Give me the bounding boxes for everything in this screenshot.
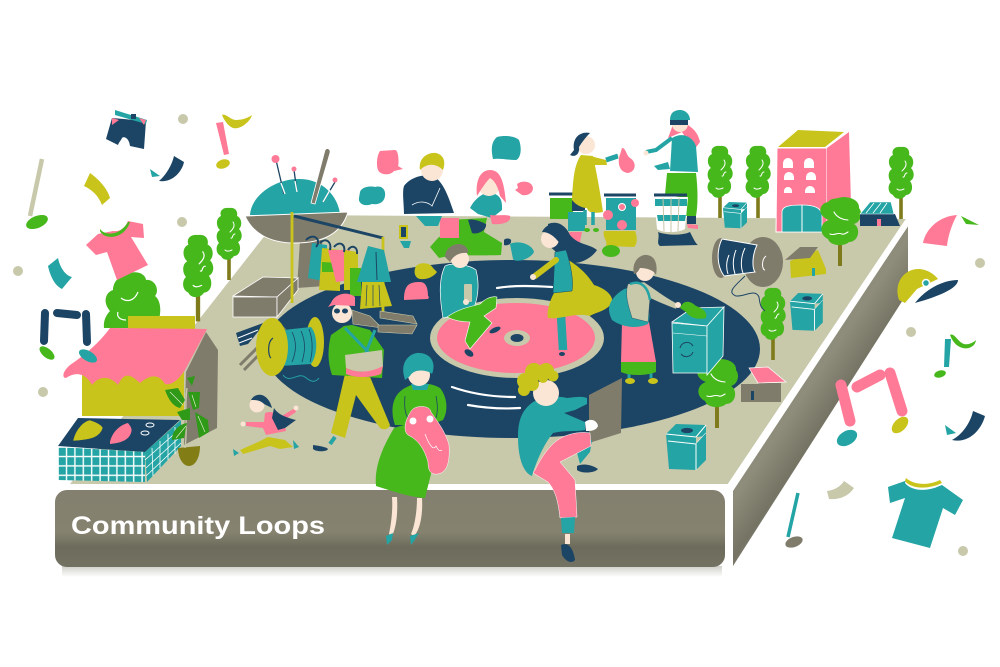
tree bbox=[761, 288, 786, 360]
head bbox=[451, 250, 469, 268]
back flange bbox=[743, 237, 783, 287]
cap bbox=[897, 269, 958, 303]
pink blob bbox=[569, 232, 582, 244]
scraps and cup bbox=[504, 238, 511, 245]
tree bbox=[697, 359, 738, 428]
cardboard boxes and rails bbox=[233, 277, 298, 370]
hands bbox=[410, 418, 416, 424]
teal rug bbox=[416, 216, 442, 226]
navy bag bbox=[658, 232, 698, 246]
shoes bbox=[625, 378, 635, 384]
blue house bbox=[860, 214, 900, 226]
loose thread bbox=[283, 375, 319, 381]
backpack strap bbox=[345, 328, 375, 362]
top bbox=[392, 384, 446, 425]
green trousers bbox=[447, 297, 497, 349]
tiled counter front bbox=[58, 447, 145, 482]
front face bbox=[55, 490, 725, 567]
curly hair bbox=[517, 363, 558, 396]
cuff bbox=[561, 517, 575, 533]
pink trousers bbox=[533, 432, 591, 518]
person: running child bbox=[233, 395, 299, 456]
collar bbox=[411, 384, 429, 390]
tree bbox=[217, 208, 242, 280]
bubble teal bbox=[492, 136, 521, 160]
person: woman with bag bbox=[609, 255, 681, 384]
note: teal exclamation bbox=[933, 334, 976, 379]
arm bbox=[535, 260, 556, 276]
platform top surface bbox=[70, 215, 906, 484]
legs bbox=[389, 497, 422, 536]
cup bbox=[464, 284, 472, 302]
tree bbox=[889, 147, 914, 219]
hand bbox=[585, 420, 598, 431]
tree bbox=[183, 235, 213, 321]
cushion dome bbox=[250, 179, 340, 215]
wooden planks bbox=[352, 310, 417, 334]
person: man in beanie bbox=[644, 110, 700, 246]
pink roof house bbox=[741, 384, 780, 402]
teal vest bbox=[553, 250, 573, 293]
cap bbox=[328, 294, 355, 307]
stem bbox=[297, 240, 325, 288]
platform right side face bbox=[733, 226, 908, 566]
board bbox=[589, 378, 622, 443]
confetti olive bbox=[84, 173, 110, 205]
bubble pink small bbox=[515, 182, 533, 195]
cape and skirt bbox=[548, 258, 612, 318]
recycling bins bbox=[666, 202, 823, 470]
person: woman in green dress bbox=[376, 353, 449, 545]
pink cloth piece bbox=[440, 218, 459, 238]
green cloth bbox=[430, 218, 502, 258]
needle bbox=[311, 149, 330, 204]
bowl bbox=[245, 212, 348, 243]
confetti teal triangle bbox=[150, 169, 160, 177]
trees bbox=[183, 146, 914, 428]
head bbox=[533, 380, 559, 406]
pink garment held bbox=[619, 148, 635, 173]
girl body bbox=[470, 192, 502, 218]
record grooves bbox=[452, 286, 552, 408]
building and houses bbox=[741, 130, 900, 402]
pink garment bbox=[405, 406, 449, 474]
spool: right thread bbox=[712, 237, 783, 311]
sweater bbox=[518, 397, 587, 476]
pink building bbox=[776, 148, 827, 232]
recycle bin bbox=[672, 302, 724, 375]
front flange bbox=[712, 238, 730, 278]
back leg bbox=[575, 440, 592, 464]
ankle and shoe bbox=[565, 534, 570, 544]
confetti: left bbox=[13, 110, 252, 397]
small bin bbox=[666, 424, 706, 470]
dot bbox=[177, 217, 187, 227]
hem bbox=[621, 362, 656, 375]
folded clothes bbox=[73, 420, 103, 441]
potted plant bbox=[178, 446, 200, 466]
record label bbox=[430, 298, 604, 378]
dot bbox=[906, 327, 916, 337]
pins bbox=[276, 160, 335, 202]
jacket bbox=[670, 135, 698, 172]
wide tree in front of building bbox=[820, 197, 861, 266]
person: seated man centre bbox=[440, 244, 501, 358]
head bbox=[408, 364, 430, 386]
person: woman in olive dress bbox=[549, 133, 639, 257]
note: pink beamed bbox=[834, 373, 911, 450]
clothes rack bbox=[292, 212, 392, 318]
loose thread bbox=[732, 276, 765, 311]
panel: platform base bbox=[55, 215, 908, 577]
white edge lines bbox=[55, 221, 908, 488]
basket bbox=[654, 194, 687, 196]
skirt bbox=[621, 322, 656, 362]
legs bbox=[559, 315, 565, 350]
pink hat bbox=[404, 282, 429, 300]
small bin bbox=[790, 293, 823, 331]
arm bbox=[606, 156, 618, 160]
skirt bbox=[376, 420, 432, 498]
head bbox=[577, 136, 595, 154]
confetti: right bbox=[784, 215, 985, 556]
man head bbox=[421, 159, 443, 181]
sock and shoe bbox=[330, 437, 335, 444]
awning bbox=[63, 328, 207, 385]
dot bbox=[975, 258, 985, 268]
tree bbox=[746, 146, 771, 218]
navy cloth piece bbox=[468, 219, 486, 233]
head bbox=[636, 263, 654, 281]
olive blob bbox=[415, 263, 437, 279]
pin cushion bbox=[245, 149, 348, 288]
garments bbox=[308, 243, 328, 282]
counter top bbox=[58, 418, 180, 452]
t-shirt pink bbox=[86, 221, 148, 280]
long pink hair bbox=[668, 122, 700, 150]
person: woman with cape bbox=[530, 223, 612, 356]
confetti pink bbox=[923, 215, 957, 246]
chart motif: vinyl record bbox=[264, 260, 760, 438]
hair bbox=[548, 223, 597, 263]
side wall bbox=[184, 332, 218, 445]
door bbox=[782, 205, 822, 232]
note: navy beamed bbox=[37, 313, 99, 365]
cloud teal bbox=[359, 187, 385, 205]
back flange bbox=[306, 317, 324, 367]
head and beanie bbox=[672, 116, 688, 132]
pink fabric bbox=[490, 215, 510, 224]
head bbox=[541, 230, 559, 248]
torso and arm bbox=[627, 282, 678, 322]
navy thread bbox=[718, 239, 757, 276]
stall: market shop bbox=[58, 272, 218, 482]
loose items on record bbox=[404, 263, 437, 300]
tree bbox=[708, 146, 733, 218]
person: curly-haired man with board bbox=[517, 363, 622, 562]
shoes bbox=[386, 533, 419, 545]
jacket bbox=[328, 325, 384, 378]
head bbox=[332, 303, 352, 323]
bin left bbox=[549, 192, 587, 196]
girl head bbox=[478, 174, 500, 196]
note: pink exclamation bbox=[215, 115, 252, 170]
dot bbox=[13, 266, 23, 276]
skirt bbox=[360, 282, 392, 309]
person: seated man left bbox=[359, 136, 534, 261]
shop wall bbox=[82, 368, 184, 416]
confetti teal bbox=[48, 258, 72, 289]
bush behind shop bbox=[104, 272, 160, 328]
shoes bbox=[489, 325, 501, 335]
rack rail and poles bbox=[294, 216, 383, 238]
trousers bbox=[331, 372, 390, 438]
pants bbox=[665, 173, 698, 216]
pouch bbox=[345, 350, 383, 372]
tiled counter side bbox=[145, 420, 181, 482]
jacket bbox=[357, 246, 391, 282]
dot bbox=[38, 387, 48, 397]
confetti green triangle bbox=[961, 216, 979, 225]
dot bbox=[178, 114, 188, 124]
sweater bbox=[440, 264, 478, 318]
record disc bbox=[264, 260, 760, 438]
olive blob bbox=[604, 231, 637, 247]
t-shirt teal bbox=[888, 478, 963, 548]
confetti teal triangle bbox=[945, 425, 956, 435]
confetti khaki bbox=[827, 481, 854, 499]
note: khaki bbox=[24, 159, 50, 232]
spool: left thread bbox=[256, 317, 324, 381]
windows bbox=[783, 158, 816, 193]
upper shelf bbox=[128, 316, 195, 329]
man body bbox=[403, 175, 454, 214]
person: man with sunglasses bbox=[313, 294, 390, 451]
yellow house bbox=[790, 250, 826, 278]
confetti navy bbox=[159, 156, 184, 181]
bubble pink bbox=[377, 150, 403, 174]
thread bbox=[274, 327, 316, 366]
dress bbox=[572, 155, 603, 213]
dot bbox=[958, 546, 968, 556]
legs bbox=[585, 210, 593, 225]
bag bbox=[609, 287, 649, 327]
note: teal long bbox=[784, 493, 804, 550]
green bubble bbox=[602, 245, 620, 257]
confetti navy bbox=[952, 411, 985, 441]
shadow under front face bbox=[62, 566, 722, 577]
thread bobbin bbox=[399, 225, 408, 239]
title: Community Loops bbox=[71, 512, 325, 540]
bin right bbox=[604, 194, 636, 196]
front flange bbox=[256, 318, 288, 376]
shorts bbox=[106, 110, 147, 149]
teal hair bbox=[403, 353, 434, 380]
small bin bbox=[723, 202, 747, 228]
